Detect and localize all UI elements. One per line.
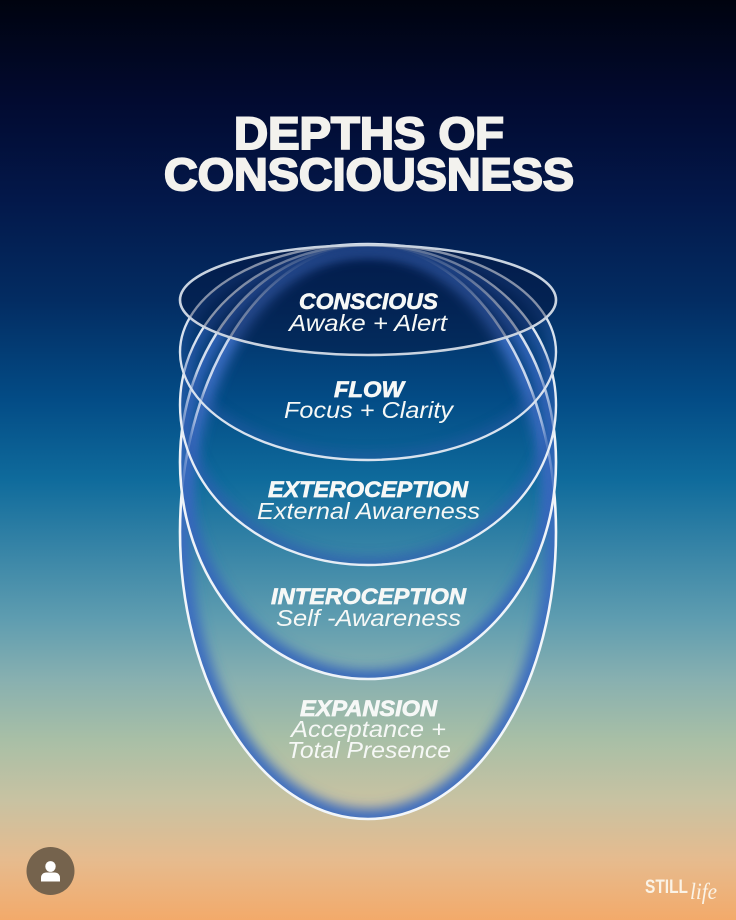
layer: conscious — [180, 245, 556, 355]
label: interoception: INTEROCEPTION — [271, 584, 467, 609]
logo: still life: life — [690, 879, 717, 904]
label: exteroception — [257, 477, 481, 524]
label: flow: FLOW — [334, 377, 406, 402]
label: expansion — [287, 696, 451, 763]
label: interoception: Self -Awareness — [276, 605, 462, 631]
layer: flow — [180, 244, 556, 460]
label: expansion: EXPANSION — [300, 696, 438, 721]
layer: exteroception — [180, 245, 556, 565]
label: interoception — [271, 584, 467, 631]
label: flow: Focus + Clarity — [284, 397, 455, 423]
label: expansion: Total Presence — [287, 737, 451, 763]
title: CONSCIOUSNESS — [164, 149, 574, 200]
label: expansion: Acceptance + — [289, 716, 446, 742]
icon: profile badge — [26, 847, 74, 895]
logo: still life: STILL — [645, 877, 688, 898]
label: flow — [284, 377, 455, 423]
label: conscious: Awake + Alert — [287, 310, 449, 336]
layer: interoception — [180, 245, 556, 679]
layer: expansion — [180, 245, 556, 819]
nested depth diagram — [180, 244, 556, 819]
label: exteroception: External Awareness — [257, 498, 481, 524]
label: conscious: CONSCIOUS — [299, 289, 438, 314]
label: exteroception: EXTEROCEPTION — [268, 477, 469, 502]
title — [164, 108, 574, 200]
logo: still life — [645, 877, 717, 904]
label: conscious — [287, 289, 449, 336]
title: DEPTHS OF — [234, 108, 504, 159]
